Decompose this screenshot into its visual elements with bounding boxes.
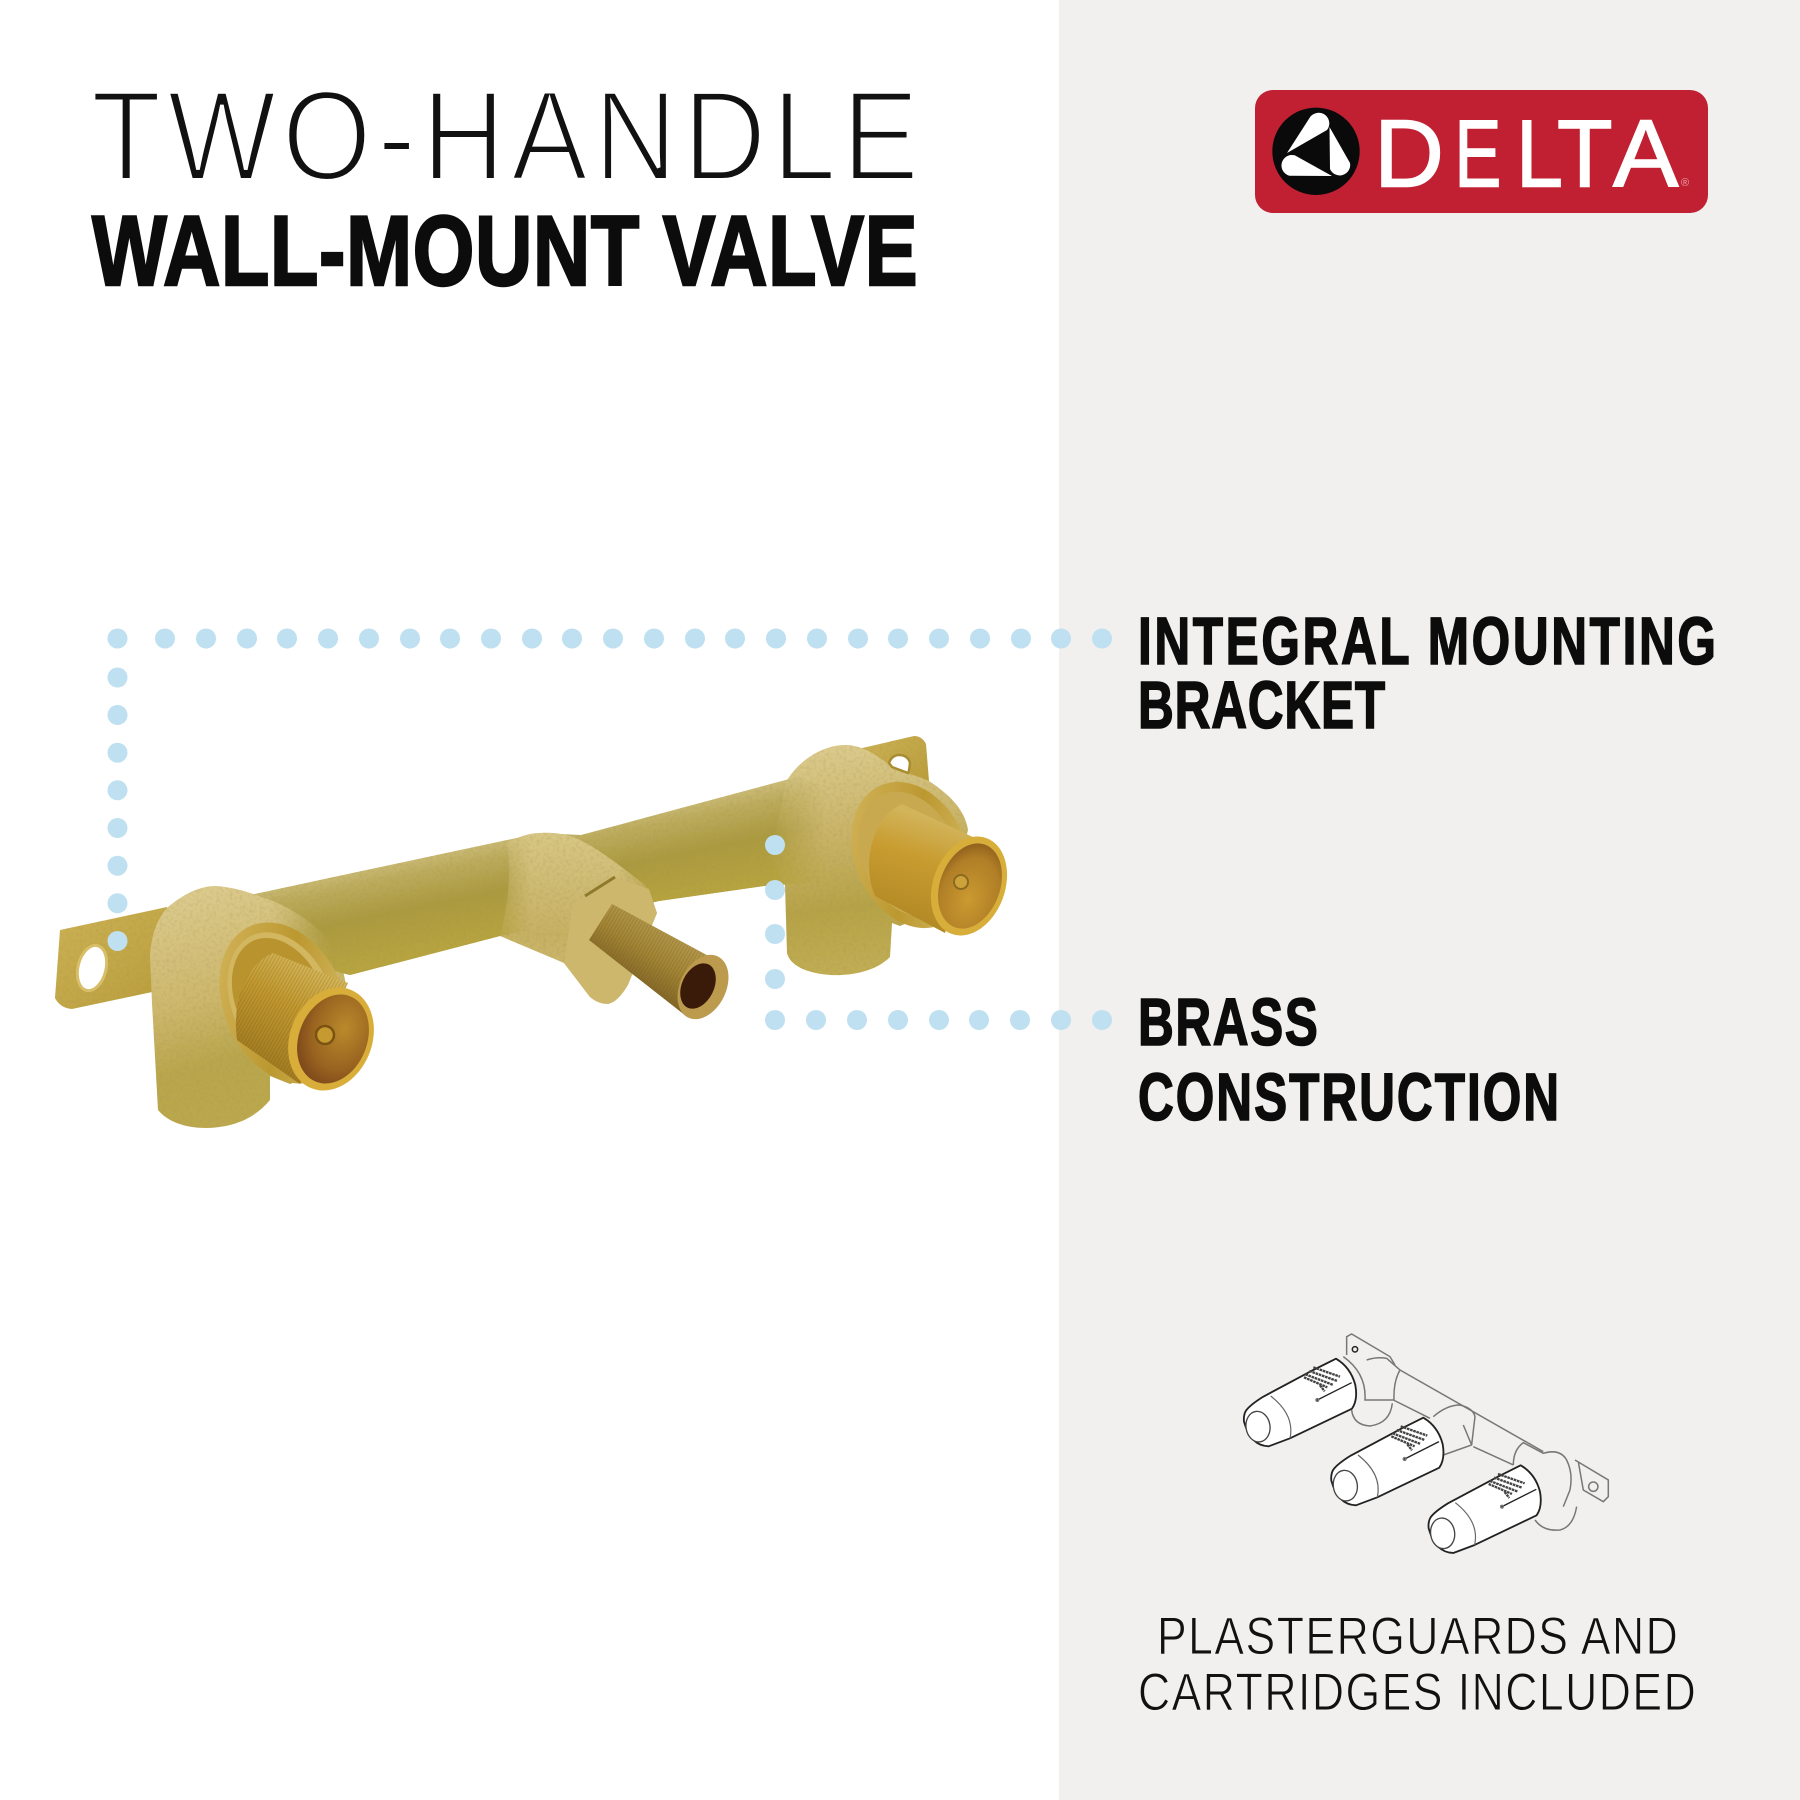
logo wordmark	[1374, 100, 1678, 208]
logo badge	[1255, 90, 1708, 213]
caption: plasterguards and cartridges included: PLASTERGUARDS AND	[1157, 1607, 1678, 1666]
logo wordmark: E	[1454, 100, 1501, 208]
callout: dotted leader to brass body	[765, 835, 1112, 1030]
right bracket hole	[889, 755, 910, 773]
label: integral mounting bracket: BRACKET	[1138, 669, 1385, 743]
pipe blend into castings	[279, 780, 816, 975]
title line 2: bold: WALL-MOUNT VALVE	[92, 196, 918, 306]
left bracket	[55, 907, 185, 1009]
nut shadow edge	[585, 877, 615, 896]
label: integral mounting bracket	[1138, 605, 1716, 743]
caption: plasterguards and cartridges included	[1138, 1607, 1696, 1722]
label: brass construction: BRASS	[1138, 986, 1318, 1060]
background panel: white left	[0, 0, 1059, 1800]
left threaded cylinder	[195, 902, 389, 1104]
centre hub	[500, 833, 657, 1004]
main pipe	[250, 777, 860, 975]
panel: right grey column	[1059, 0, 1800, 1800]
logo wordmark: D	[1374, 100, 1444, 208]
right mounting bracket	[858, 736, 929, 790]
caption: plasterguards and cartridges included: CARTRIDGES INCLUDED	[1138, 1663, 1696, 1722]
product photo: brass valve	[55, 736, 1020, 1128]
right elbow body and leg	[770, 745, 968, 975]
left elbow body and leg	[150, 886, 346, 1128]
callout: dotted leader to mounting bracket	[108, 628, 1112, 951]
logo mark	[1272, 108, 1360, 195]
label: integral mounting bracket: INTEGRAL MOUNTING	[1138, 605, 1716, 679]
title line 1: light: TWO-HANDLE	[91, 64, 919, 207]
centre washer and nut	[564, 877, 657, 1004]
logo wordmark: L	[1516, 100, 1563, 208]
logo: Delta	[1255, 90, 1708, 213]
line drawing: plasterguards and cartridges	[1244, 1334, 1608, 1553]
label: brass construction	[1138, 986, 1559, 1135]
label: brass construction: CONSTRUCTION	[1138, 1061, 1559, 1135]
registered mark: ®	[1681, 177, 1689, 189]
left bracket hole	[73, 942, 111, 994]
title	[91, 64, 919, 306]
threaded centre stem	[589, 904, 739, 1028]
logo wordmark: A	[1613, 100, 1678, 208]
right threaded cylinder	[829, 763, 1020, 947]
logo wordmark: T	[1557, 100, 1613, 208]
